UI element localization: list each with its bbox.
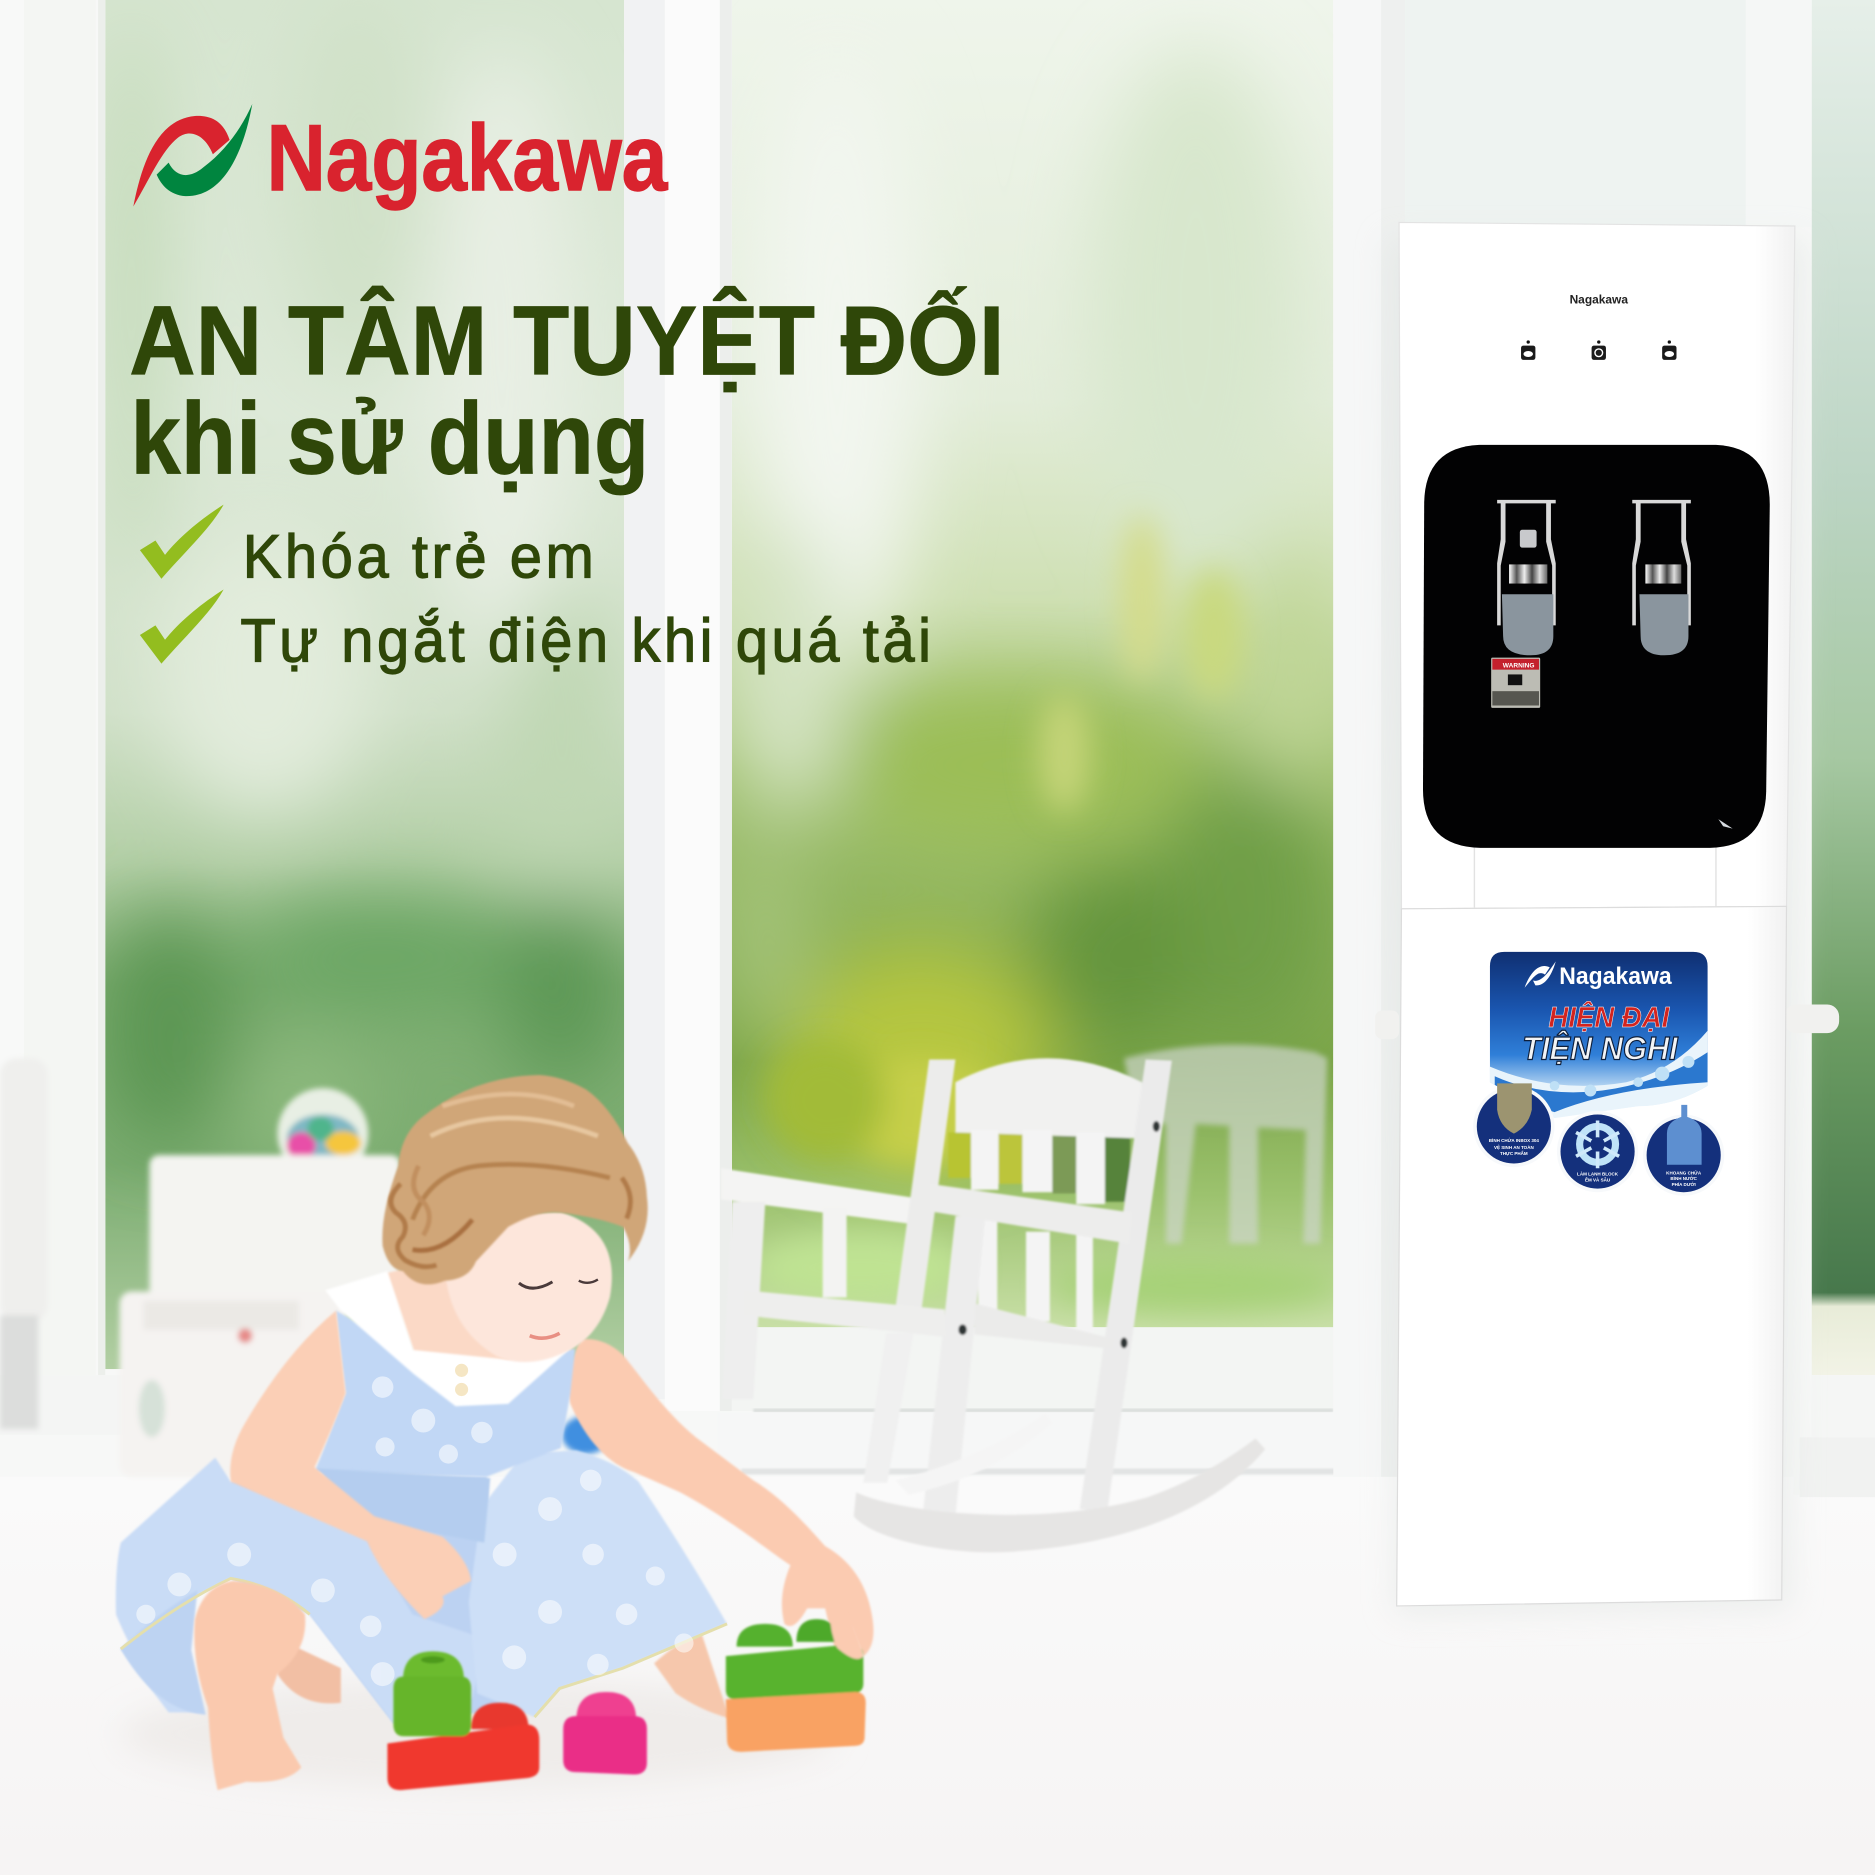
button: power: [1592, 340, 1606, 360]
tap: hot: [1497, 500, 1556, 655]
center window with blurred garden: [729, 0, 1339, 1327]
feature: overload cut-off: Tự ngắt điện khi quá tải: [240, 606, 931, 675]
sticker logo: Nagakawa: [1559, 963, 1672, 990]
feature badge: stainless tank: [1473, 1083, 1555, 1167]
collar buttons: [455, 1364, 468, 1396]
product sticker: TIỆN NGHI: [1522, 1030, 1679, 1066]
rocking chair background reflection: [1124, 1045, 1327, 1244]
chair posts: [894, 1059, 955, 1315]
dress skirt right: [469, 1450, 727, 1717]
dispenser upper body: [1399, 222, 1795, 909]
feature list: [140, 505, 931, 675]
rocking chair: [721, 1058, 1265, 1552]
tray highlight: [1718, 819, 1733, 829]
hair highlights and curls: [391, 1094, 630, 1267]
feature badge: block cooling: LÀM LẠNH BLOCK: [1577, 1170, 1619, 1176]
blurred toy boxes and ball: [120, 1088, 401, 1477]
inner thigh: [277, 1638, 341, 1703]
dispenser shadow: [1387, 239, 1806, 1614]
pink block: [563, 1692, 647, 1775]
feature badge: block cooling: [1557, 1111, 1638, 1192]
title: khi sử dụng: [130, 382, 649, 496]
dress waist gathers: [317, 1468, 490, 1543]
blocks: [387, 1602, 866, 1790]
left window with blurred garden: [96, 0, 624, 1369]
chair front rocker: [854, 1439, 1265, 1552]
feature badge: bottom bottle: BÌNH NƯỚC: [1670, 1174, 1698, 1181]
feature badge: bottom bottle: PHÍA DƯỚI: [1672, 1180, 1696, 1187]
button: cold: [1662, 340, 1676, 360]
feature badge: bottom bottle: [1643, 1105, 1724, 1196]
leg and foot: [194, 1581, 305, 1790]
face: [445, 1212, 612, 1362]
chair back rocker: [896, 1413, 1052, 1495]
feature badge: bottom bottle: KHOANG CHỨA: [1666, 1169, 1702, 1175]
dress skirt left: [116, 1458, 487, 1723]
chair screws: [958, 1121, 1160, 1348]
product sticker: [1473, 952, 1724, 1196]
collar: [325, 1271, 592, 1406]
warning label: WARNING: [1503, 662, 1535, 669]
feature badge: stainless tank: VỆ SINH AN TOÀN: [1494, 1143, 1534, 1150]
water dispenser: [1375, 222, 1839, 1614]
hair: [382, 1075, 648, 1284]
blue toy behind child: [562, 1416, 610, 1454]
tap: cold: [1632, 500, 1691, 655]
sticker headline: HIỆN ĐẠI: [1549, 1000, 1670, 1034]
large green block: [726, 1619, 863, 1699]
dress polka dots: [136, 1376, 694, 1686]
logo: [133, 104, 668, 210]
chair left arm: [721, 1168, 916, 1224]
icon: check mark: [140, 590, 224, 664]
eyes and mouth: [519, 1279, 598, 1338]
black tap recess: [1423, 445, 1770, 848]
window frames: [0, 0, 1875, 1497]
center window lower glass and patio: [717, 1327, 1375, 1474]
feature badge: block cooling: ÊM VÀ SÂU: [1585, 1175, 1610, 1182]
chair seat rails: [744, 1290, 945, 1337]
feature: child lock: Khóa trẻ em: [243, 522, 594, 591]
dress hem trim: [121, 1578, 727, 1717]
dress skirt underlayer: [231, 1477, 502, 1723]
far foot: [654, 1635, 729, 1718]
chair arm rail: [930, 1184, 1131, 1244]
dispenser lower body: [1397, 906, 1787, 1606]
feature badge: stainless tank: BÌNH CHỨA INBOX 304: [1489, 1136, 1539, 1143]
chair back panel: [955, 1058, 1142, 1138]
control buttons: [1521, 340, 1676, 360]
chair slat gaps: [948, 1132, 1130, 1202]
drip tray: [1474, 847, 1716, 908]
fingers over green block: [830, 1602, 863, 1659]
warning label: [1491, 658, 1540, 708]
title: [129, 285, 1004, 496]
sticker water splash: [1490, 1031, 1708, 1118]
floor shadow under child: [120, 1680, 837, 1788]
dispenser side knobs: [1375, 1004, 1839, 1039]
blurred furniture: side chair at left edge: [0, 1058, 48, 1429]
child playing: [116, 1075, 873, 1790]
logo mark: red swoosh and green swoosh: [133, 104, 252, 207]
orange block: [726, 1692, 866, 1752]
right arm: [568, 1339, 873, 1656]
dress bodice: [314, 1311, 575, 1477]
button: hot: [1521, 340, 1535, 360]
dress skirt lower fill: [121, 1590, 206, 1715]
icon: check mark: [140, 505, 224, 579]
red block: [387, 1703, 539, 1790]
neck: [385, 1250, 514, 1363]
logo wordmark: Nagakawa: [267, 106, 668, 210]
right window with blurred garden: [1812, 0, 1875, 1375]
small green block: [393, 1651, 471, 1736]
feature badge: stainless tank: THỰC PHẨM: [1500, 1150, 1528, 1156]
chair back slats: [971, 1130, 1105, 1333]
title: AN TÂM TUYỆT ĐỐI: [129, 285, 1004, 395]
brand label: Nagakawa: [1570, 293, 1628, 307]
left arm and hand: [230, 1311, 471, 1619]
